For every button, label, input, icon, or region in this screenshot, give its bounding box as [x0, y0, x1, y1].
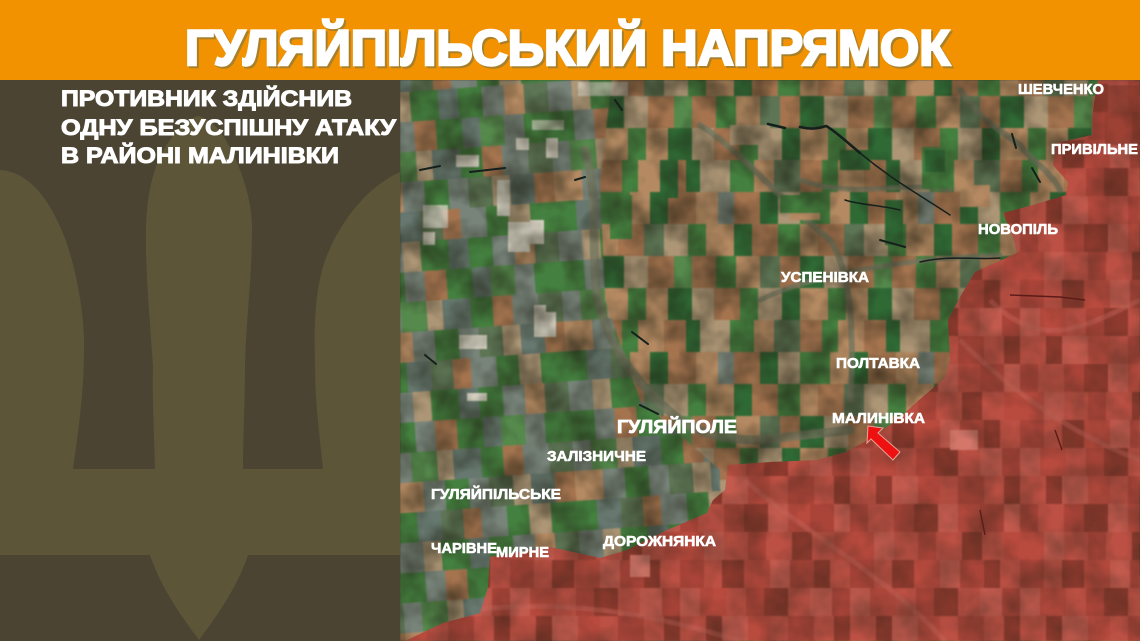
label: Мирне: МИРНЕ [496, 545, 549, 561]
label: Залізничне: ЗАЛІЗНИЧНЕ [547, 449, 646, 465]
text block: summary: В РАЙОНІ МАЛИНІВКИ [61, 143, 339, 168]
label: Новопіль: НОВОПІЛЬ [978, 222, 1058, 238]
text block: summary [61, 85, 398, 168]
pale valley streak [470, 300, 1140, 641]
label: Гуляйполе: ГУЛЯЙПОЛЕ [617, 416, 737, 437]
panel: left olive background with trident [0, 116, 400, 640]
label: Чарівне: ЧАРІВНЕ [431, 541, 497, 557]
title: ГУЛЯЙПІЛЬСЬКИЙ НАПРЯМОК [187, 21, 952, 78]
occupied territory (red overlay) [400, 80, 1140, 641]
label: Успенівка: УСПЕНІВКА [781, 270, 870, 286]
white and pale fields [423, 82, 628, 401]
place labels [431, 82, 1138, 561]
farmland fields [400, 80, 1140, 641]
label: Гуляйпільське: ГУЛЯЙПІЛЬСЬКЕ [431, 485, 561, 503]
green fields east [922, 147, 949, 189]
label: Полтавка: ПОЛТАВКА [836, 356, 921, 372]
creeks [420, 100, 1040, 414]
emblem: trident watermark [0, 116, 400, 640]
title: ГУЛЯЙПІЛЬСЬКИЙ НАПРЯМОК [185, 19, 950, 76]
text block: summary: ОДНУ БЕЗУСПІШНУ АТАКУ [61, 115, 396, 140]
terrain mottling [400, 80, 1140, 641]
label: Шевченко: ШЕВЧЕНКО [1018, 82, 1104, 98]
header bar [0, 0, 1140, 80]
text block: summary: ПРОТИВНИК ЗДІЙСНИВ [61, 86, 352, 111]
label: Дорожнянка: ДОРОЖНЯНКА [603, 534, 717, 550]
arrow: attack near Malynivka [867, 426, 900, 460]
label: Привільне: ПРИВІЛЬНЕ [1051, 142, 1138, 158]
grey valley strips [585, 90, 1060, 440]
label: Малинівка: МАЛИНІВКА [832, 411, 926, 427]
tan strip fields east [730, 125, 770, 145]
panel: satellite map [400, 80, 1140, 641]
